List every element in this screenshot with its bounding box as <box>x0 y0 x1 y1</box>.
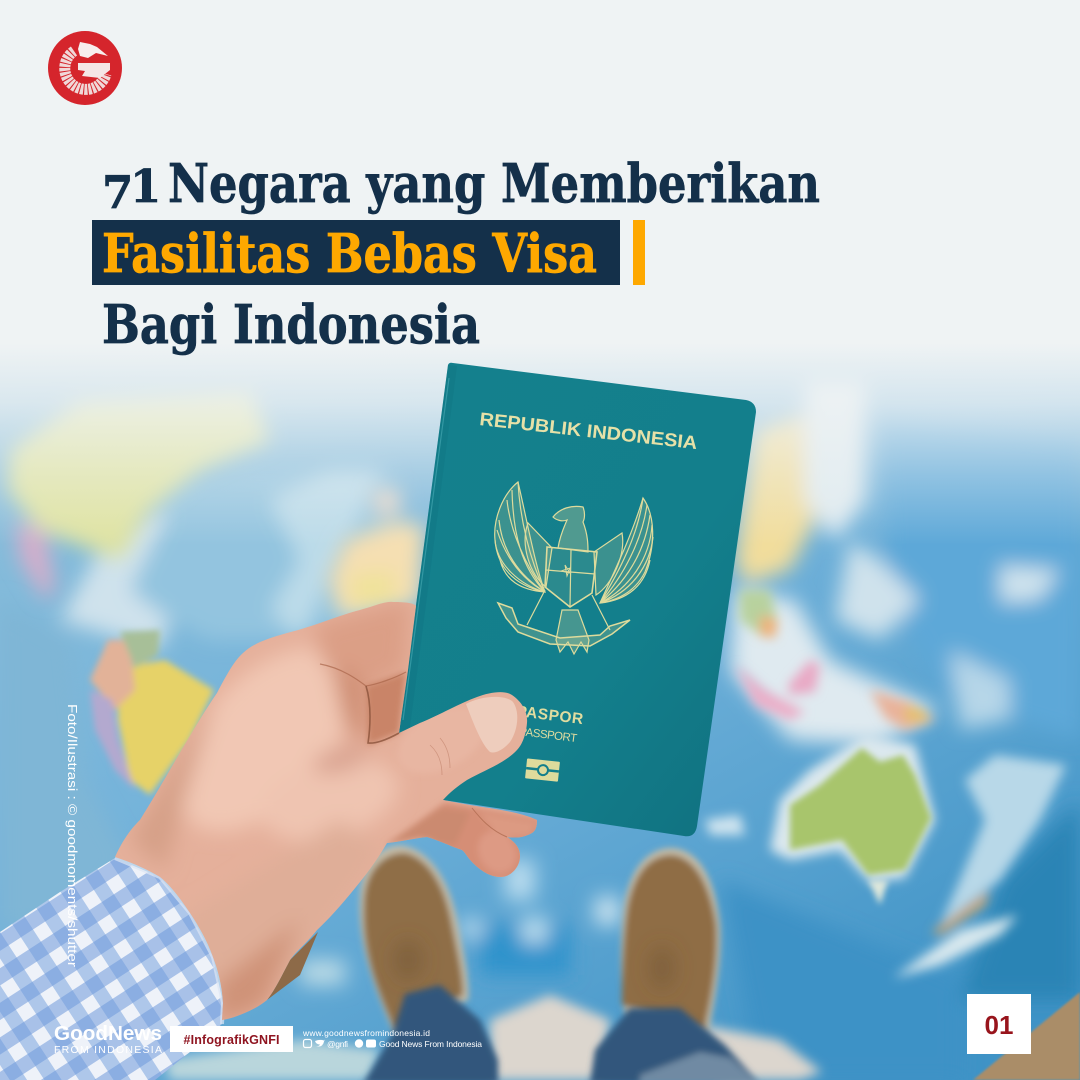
title line 1: Negara yang Memberikan <box>168 153 820 215</box>
thumbnail <box>466 697 517 753</box>
title <box>92 153 820 356</box>
photo credit: Foto/Ilustrasi : © goodmoments/shutter <box>65 704 80 968</box>
title line 1: 1 <box>130 160 161 213</box>
shirt sleeve <box>0 858 223 1080</box>
page number: 01 <box>985 1010 1013 1040</box>
hashtag badge: #InfografikGNFI <box>184 1033 280 1047</box>
brand wordmark: FROM INDONESIA <box>54 1044 162 1056</box>
hand <box>115 602 537 1020</box>
passport label: PASSPORT <box>519 726 578 745</box>
hand creases <box>320 664 507 837</box>
social links: @gnfi <box>327 1039 348 1049</box>
social links: Good News From Indonesia <box>379 1039 482 1049</box>
map: South America <box>90 630 214 795</box>
passport <box>399 363 756 836</box>
brand wordmark: GoodNews <box>54 1023 162 1045</box>
brand wordmark <box>54 1023 162 1056</box>
page number <box>967 994 1031 1054</box>
map: New Zealand and ridges <box>705 755 1066 978</box>
map: pale coasts and oceans <box>0 420 1080 1080</box>
title line 3: Bagi Indonesia <box>102 294 480 356</box>
title accent bar <box>633 220 645 285</box>
map: Antarctica and tan corner <box>165 995 822 1080</box>
title line 1: 7 <box>102 166 133 219</box>
top fade panel <box>0 0 1080 545</box>
passport label: PASPOR <box>516 703 584 728</box>
hashtag badge <box>170 1026 293 1052</box>
social links <box>302 1028 482 1049</box>
shoes and jeans <box>360 845 760 1080</box>
title highlight band <box>92 220 620 285</box>
title line 2: Fasilitas Bebas Visa <box>102 223 597 285</box>
footer branding <box>54 1023 482 1056</box>
background: blurred world map <box>0 340 1080 1080</box>
hand shading <box>130 600 410 1025</box>
map: North America <box>8 390 270 600</box>
logo: GNFI emblem <box>48 31 122 105</box>
map: Africa and Europe <box>328 490 425 618</box>
map: Australia <box>770 735 935 905</box>
passport label <box>516 703 584 745</box>
icon: biometric chip <box>525 758 560 782</box>
passport title: REPUBLIK INDONESIA <box>479 408 699 453</box>
map: Asia and Southeast Asia <box>730 380 940 745</box>
social links: www.goodnewsfromindonesia.id <box>302 1028 430 1038</box>
icon: garuda emblem <box>495 482 653 654</box>
